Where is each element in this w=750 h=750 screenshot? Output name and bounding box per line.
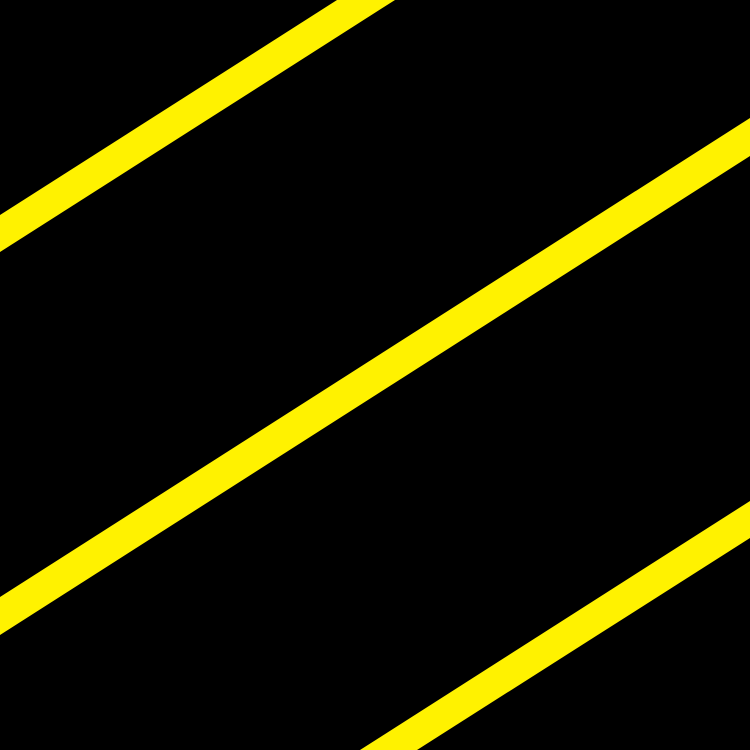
center yellow stripe <box>0 118 750 635</box>
upper-left yellow stripe <box>0 0 395 252</box>
lower-right yellow stripe <box>360 501 750 750</box>
